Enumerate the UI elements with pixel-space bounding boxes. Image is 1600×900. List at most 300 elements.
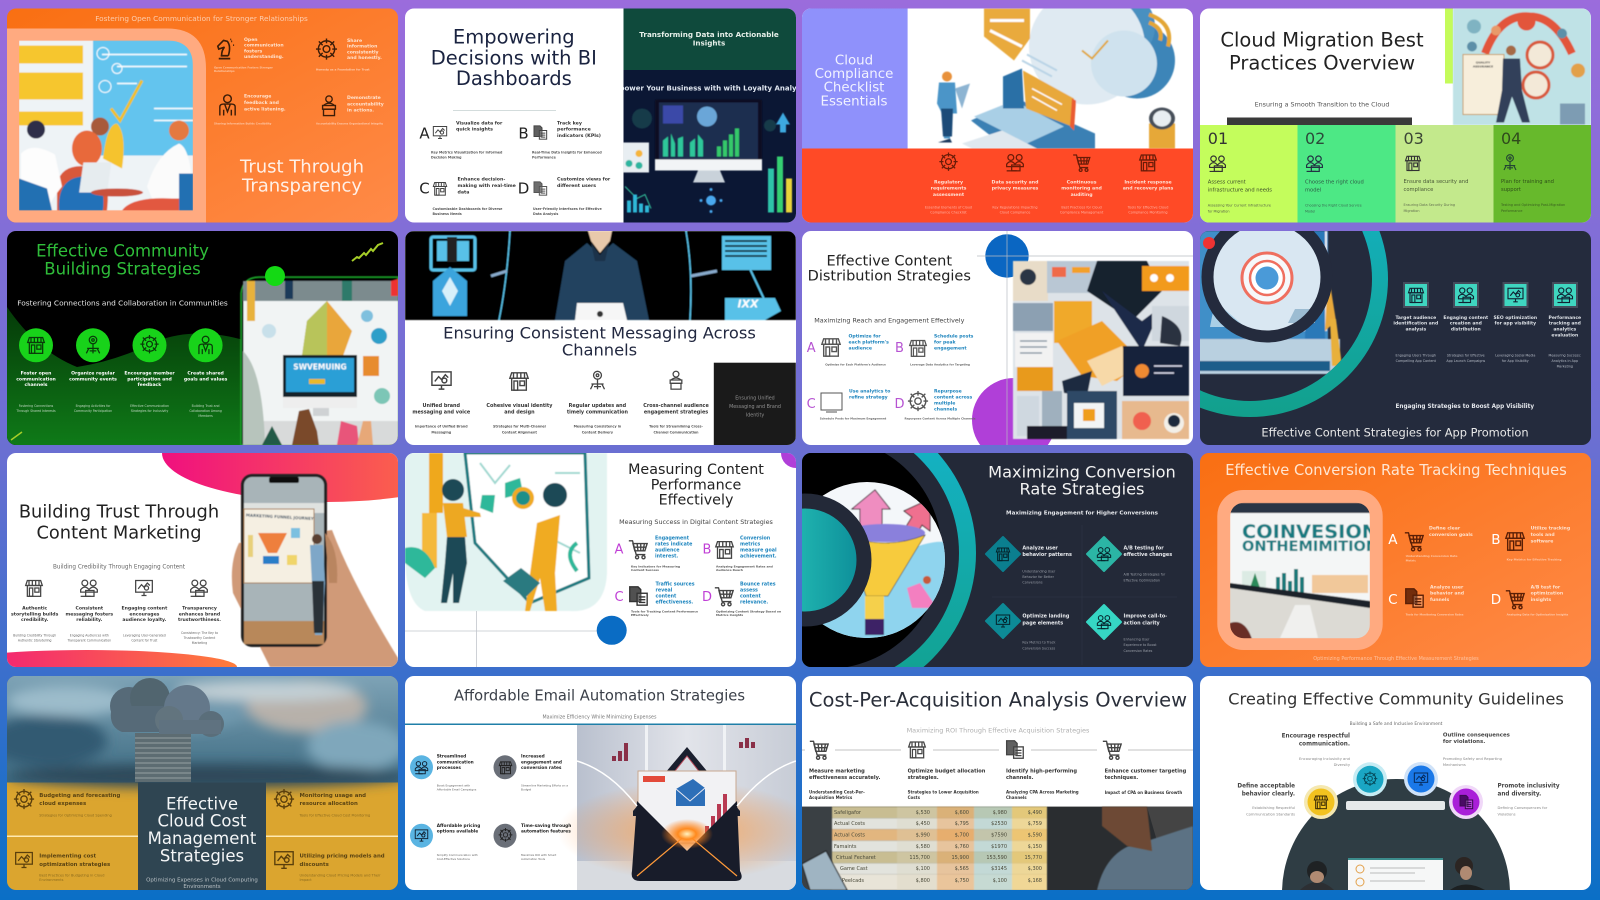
title: Maximizing Conversion [988, 462, 1176, 481]
subtitle: Building Credibility Through Engaging Content [53, 564, 186, 570]
subtitle: Ensuring a Smooth Transition to the Cloud [1255, 100, 1389, 108]
caption 4: Analytics in App [1552, 359, 1578, 363]
caption 3: Channels [1006, 794, 1027, 800]
photo: cost table and analyst: $2530 [991, 821, 1007, 827]
caption 3: Content Delivery [582, 430, 614, 434]
item B [520, 125, 548, 140]
photo: cost table and analyst: $,100 [916, 866, 930, 872]
subtitle: Maximizing Reach and Engagement Effectively [814, 316, 965, 324]
dark callout: Identity [746, 412, 764, 418]
caption C: Tools for Tracking Content Performance [631, 609, 698, 613]
caption B: Analyzing Engagement Rates and [716, 564, 773, 568]
text: share information: Share [347, 38, 362, 44]
band: red icons [802, 148, 1193, 222]
caption 2: Environments [39, 878, 64, 882]
icon [433, 126, 447, 138]
icon: truck [1073, 155, 1090, 171]
photo: cost table and analyst: $,760 [955, 844, 969, 850]
step 01: 01 [1208, 129, 1228, 148]
blue dot [597, 616, 627, 645]
text B: software [1531, 538, 1553, 544]
icon [630, 587, 647, 605]
text 2: community events [69, 376, 117, 382]
icon [433, 182, 447, 195]
caption: define: Communication Standards [1246, 813, 1295, 817]
item 3 [410, 824, 433, 848]
text 2: conversion rates [521, 764, 562, 770]
caption 4: Enhancing User [1124, 638, 1150, 642]
panel: Conversion Rate Strategies [676, 403, 1193, 703]
blue circle [985, 234, 1029, 278]
caption 3: Key Metrics to Track [1022, 640, 1056, 644]
text: share information: information [347, 43, 377, 49]
caption 3: Strategies for Inclusivity [131, 409, 168, 413]
caption 1: Strategies for Optimizing Cloud Spending [39, 814, 112, 818]
caption C: Effectively [631, 613, 649, 617]
text C: making with real-time [458, 182, 516, 188]
caption 2: App Launch Campaigns [1446, 359, 1486, 363]
caption 4: Maximize ROI with Smart [521, 853, 557, 857]
title: Cloud Cost [157, 811, 247, 830]
text 1: credibility. [21, 616, 49, 622]
text: open communication: communication [244, 42, 284, 48]
text: encourage: Encourage respectful [1282, 734, 1350, 740]
subtitle: Engaging Strategies to Boost App Visibility [1396, 404, 1534, 410]
caption 3: Measuring Consistency in [574, 425, 622, 429]
text: define: behavior clearly. [1242, 791, 1295, 797]
text: encourage: communication. [1299, 742, 1350, 748]
icon [1097, 548, 1111, 561]
text 2: strategies. [908, 775, 939, 781]
caption 2: Key Regulations Impacting [992, 206, 1038, 210]
item D: D [1491, 592, 1501, 608]
icon 3 [136, 580, 152, 596]
text 3: Identify high-performing [1006, 768, 1077, 774]
photo: cost table and analyst: $,168 [1028, 878, 1042, 884]
icon 4 [189, 328, 223, 362]
caption D: Data Analysis [533, 212, 558, 216]
subtitle: Fostering Connections and Collaboration in Communities [17, 298, 228, 308]
step 02: 02 [1305, 129, 1325, 148]
title: Building Strategies [44, 259, 201, 278]
caption: outline: Promoting Safety and Reporting [1443, 757, 1502, 761]
text D: optimization [1531, 590, 1563, 596]
text C: funnels [1430, 596, 1449, 602]
icon [1405, 533, 1423, 551]
text 1: messaging and voice [412, 409, 471, 415]
text: optimization strategies [39, 862, 110, 868]
caption 2: Costs [908, 794, 921, 800]
caption A: Key Indicators for Measuring [631, 564, 680, 568]
photo: cost table and analyst: $,530 [916, 810, 930, 816]
teal ring [676, 403, 976, 703]
icon [1097, 616, 1111, 629]
icon 2 [510, 373, 528, 390]
caption 3: Best Practices for Cloud [1061, 206, 1102, 210]
caption 4: Understanding Cloud Pricing Models and Their [300, 873, 381, 877]
item 4 [494, 824, 516, 848]
subtitle: Regulatory Adherence in [811, 184, 897, 192]
text 3: channels. [1006, 775, 1034, 781]
caption 1: Understanding Cost-Per- [809, 789, 865, 794]
caption: Choosing the Right Cloud Service [1305, 204, 1362, 208]
text 2: Engaging content [1443, 314, 1489, 320]
caption 1: Essential Elements of Cloud [925, 206, 972, 210]
text: regulatory: requirements [931, 185, 967, 191]
panel: Building Trust [0, 404, 492, 684]
text: cloud expenses [39, 801, 86, 807]
caption 1: Compliance Checklist [930, 210, 967, 214]
text: Choose the right cloud [1305, 180, 1364, 186]
dark callout: Ensuring Unified [735, 395, 775, 401]
caption 4: Tools for Streamlining Cross- [649, 425, 703, 429]
text: Utilizing pricing models and [300, 854, 385, 860]
illustration: glowing envelope [557, 725, 817, 890]
caption B: Key Metrics for Effective Tracking [1507, 558, 1561, 562]
caption 3: Leveraging User-Generated [123, 633, 166, 637]
subtitle: Optimizing Performance Through Effective Measurement Strategies [1313, 656, 1479, 662]
text 2: Organize regular [71, 370, 116, 376]
caption 2: Engaging Activities for [76, 404, 111, 408]
text A: interest. [655, 553, 678, 559]
item 3 [986, 604, 1020, 638]
caption 2: Cloud Compliance [1000, 210, 1030, 214]
item A: A [1388, 532, 1398, 548]
icon: cloud people [1007, 155, 1023, 171]
item B: B [1491, 532, 1501, 548]
caption C: Business Needs [432, 212, 462, 216]
text C: Use analytics to [849, 388, 890, 394]
item C: C [419, 180, 430, 198]
text 4: Create shared [187, 370, 224, 376]
text 1: Authentic [22, 605, 48, 611]
photo: cost table and analyst: 153,590 [986, 855, 1007, 861]
text 1: effectiveness accurately. [809, 775, 880, 781]
text D: Repurpose [934, 388, 962, 394]
icon [996, 615, 1010, 627]
title: Performance [651, 477, 741, 493]
caption: define: Establishing Respectful [1252, 806, 1295, 810]
icon [14, 789, 34, 809]
text C: content [656, 593, 677, 599]
photo: cost table and analyst: Famaints [834, 844, 857, 850]
text A: audience [848, 345, 872, 351]
text 4: trustworthiness. [178, 616, 221, 622]
text: share information: consistently [347, 49, 379, 55]
title: Effective Community [36, 241, 209, 260]
text 3: for app visibility [1495, 320, 1536, 326]
panel heading: Insights [693, 38, 725, 47]
panel: Cost-Per-Acquisition [802, 676, 1193, 891]
icon 3 [1007, 741, 1023, 758]
caption B: Audience Reach [716, 568, 743, 572]
caption C: Tools for Monitoring Conversion Rates [1406, 612, 1464, 616]
text: caption 3: Sharing Information Builds Credibility [214, 122, 272, 126]
item 3 [274, 789, 366, 809]
photo: cost table and analyst: 15,900 [952, 855, 969, 861]
text B: measure goal [740, 547, 777, 553]
photo: cost table and analyst: Game Cast [840, 866, 868, 872]
icon 4 [1103, 741, 1121, 759]
item C [1388, 589, 1423, 608]
icon [275, 852, 293, 868]
caption 2: Best Practices for Budgeting in Cloud [39, 873, 104, 877]
caption 1: Fostering Connections [19, 404, 54, 408]
photo: cost table and analyst: $,759 [1028, 821, 1042, 827]
illustration: media collage [1013, 261, 1189, 439]
caption 1: Authentic Storytelling [18, 638, 52, 642]
title: Effective [166, 794, 238, 813]
caption 1: Engaging Users Through [1396, 354, 1436, 358]
icon [1210, 156, 1225, 171]
icon [996, 548, 1010, 561]
caption 1: Behavior for Better [1022, 575, 1055, 579]
text 4: Time-saving through [521, 822, 571, 828]
item B [895, 340, 926, 356]
panel: Trust Through Transparency [7, 8, 398, 222]
caption B: Real-Time Data Insights for Enhanced [532, 150, 602, 154]
caption 4: Building Trust and [192, 404, 220, 408]
caption 1: Boost Engagement with [437, 784, 470, 788]
text B: engagement [934, 345, 967, 351]
caption 4: Automation Tools [521, 857, 546, 861]
photo: cost table and analyst: $3145 [991, 866, 1007, 872]
icon: speaker at desk [323, 96, 335, 116]
item D: D [518, 180, 529, 198]
title: Measuring Content [628, 462, 764, 478]
subtitle: the Cloud [837, 193, 871, 201]
title: Effectively [659, 493, 734, 509]
text: infrastructure and needs [1208, 188, 1272, 194]
icon 2 [81, 580, 97, 596]
text D: channels [934, 406, 957, 412]
icon row [1404, 283, 1577, 307]
caption 3: Compliance Management [1060, 210, 1104, 214]
caption 4: Members [198, 414, 213, 418]
illustration: quality assurance [1453, 8, 1591, 125]
text: open communication: understanding. [244, 54, 284, 60]
title: Ensuring Consistent Messaging Across [443, 323, 756, 342]
caption A: Understanding Conversion Rate [1406, 554, 1458, 558]
corner accent [781, 438, 811, 468]
text 4: techniques. [1105, 775, 1138, 781]
item B: B [895, 341, 904, 356]
caption 4: Marketing [192, 641, 207, 645]
text D: relevance. [740, 599, 768, 605]
caption 1: Conversions [1022, 580, 1043, 584]
text 1: Unified brand [423, 403, 461, 409]
text 2: and design [504, 409, 535, 415]
image heading: Empower Your Business with with Loyalty Analytics [607, 84, 811, 92]
text 3: Regular updates and [569, 403, 627, 409]
text 3: Engaging content [122, 605, 168, 611]
text C: Analyze user [1430, 584, 1464, 590]
caption: encourage: Diversity [1334, 763, 1351, 767]
text 1: communication [437, 759, 474, 765]
text B: indicators (KPIs) [557, 132, 601, 138]
photo: cost table and analyst: $,100 [993, 878, 1007, 884]
title: Management [148, 828, 257, 848]
step 03: 03 [1404, 129, 1424, 148]
item C: C [614, 590, 624, 605]
item A: A [807, 341, 816, 356]
dark circle [746, 501, 864, 619]
illustration: dark meeting dome [1260, 776, 1540, 890]
icon: person with tie [220, 95, 235, 116]
center dark panel [138, 782, 266, 890]
caption 2: Transparent Communication [66, 638, 111, 642]
photo: cost table and analyst: $,600 [955, 810, 969, 816]
caption B: Leverage Data Analytics for Targeting [910, 363, 970, 367]
title: Rate Strategies [1020, 479, 1144, 498]
caption 4: Trustworthy Content [183, 636, 216, 640]
text: encourage feedback: active listening. [244, 106, 286, 112]
icon 1 [1404, 283, 1428, 307]
title: Cloud [835, 53, 873, 68]
item A [420, 126, 448, 139]
caption 3: Effective Communication [130, 404, 169, 408]
icon 4 [670, 371, 682, 389]
photo: cost table and analyst: $,750 [955, 878, 969, 884]
title: Effective Content [827, 254, 952, 270]
illustration: conversion monitor [1230, 503, 1378, 639]
caption 4: Measuring Success: [1549, 354, 1581, 358]
photo: cost table and analyst: Actual Costs [834, 821, 865, 827]
text 3: audience loyalty. [122, 616, 167, 622]
caption: Performance [1501, 209, 1522, 213]
text: incident: and recovery plans [1123, 185, 1173, 191]
item 4 [1087, 605, 1121, 639]
text 4: Cross-channel audience [643, 403, 709, 409]
text 4: Transparency [182, 605, 217, 611]
illustration: dashboard monitor [623, 100, 792, 213]
icon 3 [132, 328, 166, 362]
caption B: Performance [532, 156, 557, 160]
text 2: Increased [521, 753, 545, 759]
title: Checklist [824, 80, 884, 95]
caption A: Metric [1406, 558, 1416, 562]
illustration: team at whiteboard [19, 40, 193, 210]
photo: cost table and analyst: $,980 [993, 810, 1007, 816]
text 2: A/B testing for [1124, 545, 1164, 551]
text 2: Consistent [75, 605, 104, 611]
text: continuous: monitoring and [1061, 185, 1102, 191]
illustration: quality assurance: ASSURANCE [1473, 64, 1493, 68]
step 04 [1494, 125, 1592, 223]
caption D: Metrics Insights [716, 613, 743, 617]
photo: cost table and analyst: $,795 [955, 821, 969, 827]
caption 3: for App Visibility [1502, 359, 1529, 363]
caption 2: Strategies for Effective [1447, 354, 1485, 358]
text C: effectiveness. [656, 599, 693, 605]
caption: promote: Violations [1498, 813, 1516, 817]
caption 1: Compelling App Content [1396, 359, 1437, 363]
dark callout: Messaging and Brand [729, 404, 781, 410]
ring: yellow [1304, 785, 1338, 819]
text: Budgeting and forecasting [39, 793, 120, 799]
text: Assess current [1208, 180, 1246, 186]
icon [1506, 533, 1524, 550]
black backing [710, 437, 942, 669]
text: support [1501, 187, 1521, 193]
icon [910, 340, 926, 356]
text D: content across [934, 394, 973, 400]
text: caption 1: Relationships [214, 69, 235, 73]
item B: B [703, 542, 711, 558]
photo: cost table and analyst: $,700 [955, 832, 969, 838]
illustration: conversion monitor: COINVESION [1242, 521, 1378, 543]
caption: promote: Defining Consequences for [1498, 806, 1548, 810]
photo: cost table and analyst: $,990 [916, 832, 930, 838]
title: Effective Conversion Rate Tracking Techniques [1225, 462, 1567, 479]
icon: fingerprint gear [939, 152, 958, 171]
text: define: Define acceptable [1237, 783, 1295, 789]
caption 4: Impact of CPA on Business Growth [1105, 790, 1182, 795]
icon [274, 789, 294, 809]
photo: cost table and analyst: $,300 [1028, 866, 1042, 872]
text B: metrics [740, 541, 760, 547]
right image panel [624, 8, 796, 222]
text 3: Encourage member [124, 370, 175, 376]
title: Cloud Migration Best [1220, 28, 1424, 51]
caption: Testing and Optimizing Post-Migration [1500, 203, 1565, 207]
item 1 [410, 755, 433, 779]
icon 2 [76, 328, 110, 362]
photo: cost table and analyst: $,490 [1028, 810, 1042, 816]
gradient blob top [162, 404, 492, 502]
icon [629, 541, 647, 559]
text: Monitoring usage and [300, 793, 366, 799]
title: Affordable Email Automation Strategies [454, 688, 745, 704]
caption: Ensuring Data Security During [1404, 203, 1455, 207]
caption: encourage: Encouraging Inclusivity and [1299, 757, 1350, 761]
text: open communication: Open [244, 36, 258, 42]
caption 2: Content Alignment [502, 430, 537, 434]
text A: Engagement [655, 535, 690, 541]
icon [1506, 591, 1524, 609]
caption 3: Tools for Effective Cloud Cost Monitoring [298, 814, 370, 818]
icon 4 [1553, 283, 1577, 307]
caption 1: Affordable Email Campaigns [437, 788, 477, 792]
text 4: evaluation [1551, 332, 1578, 338]
icon 3 [590, 371, 604, 389]
text 3: Optimize landing [1022, 613, 1070, 619]
panel: BI Dashboards [405, 8, 811, 223]
illustration: person with laptop: IXX [737, 298, 759, 310]
title: Compliance [815, 66, 893, 82]
step 04: 04 [1501, 129, 1521, 148]
text D: Customize views for [557, 176, 611, 182]
text: Ensure data security and [1404, 179, 1468, 185]
text A: conversion goals [1429, 532, 1473, 538]
illustration: conversion monitor: ONTHEMIMITION [1242, 539, 1378, 555]
ring: purple [1449, 785, 1483, 819]
panel: Cloud Cost Management [0, 676, 407, 890]
text B: tools and [1531, 532, 1555, 538]
text: open communication: fosters [244, 48, 262, 54]
icon [415, 830, 428, 841]
item 1 [14, 789, 120, 809]
icon [1406, 156, 1420, 170]
icon circles [19, 328, 223, 362]
item A: A [419, 124, 430, 142]
text: promote: Promote inclusivity [1498, 783, 1560, 789]
title: Practices Overview [1229, 51, 1415, 74]
illustration: monitor with hands [241, 277, 398, 445]
text C: behavior and [1430, 590, 1464, 596]
text 2: effective changes [1124, 552, 1172, 558]
text 4: tracking and [1549, 320, 1581, 326]
